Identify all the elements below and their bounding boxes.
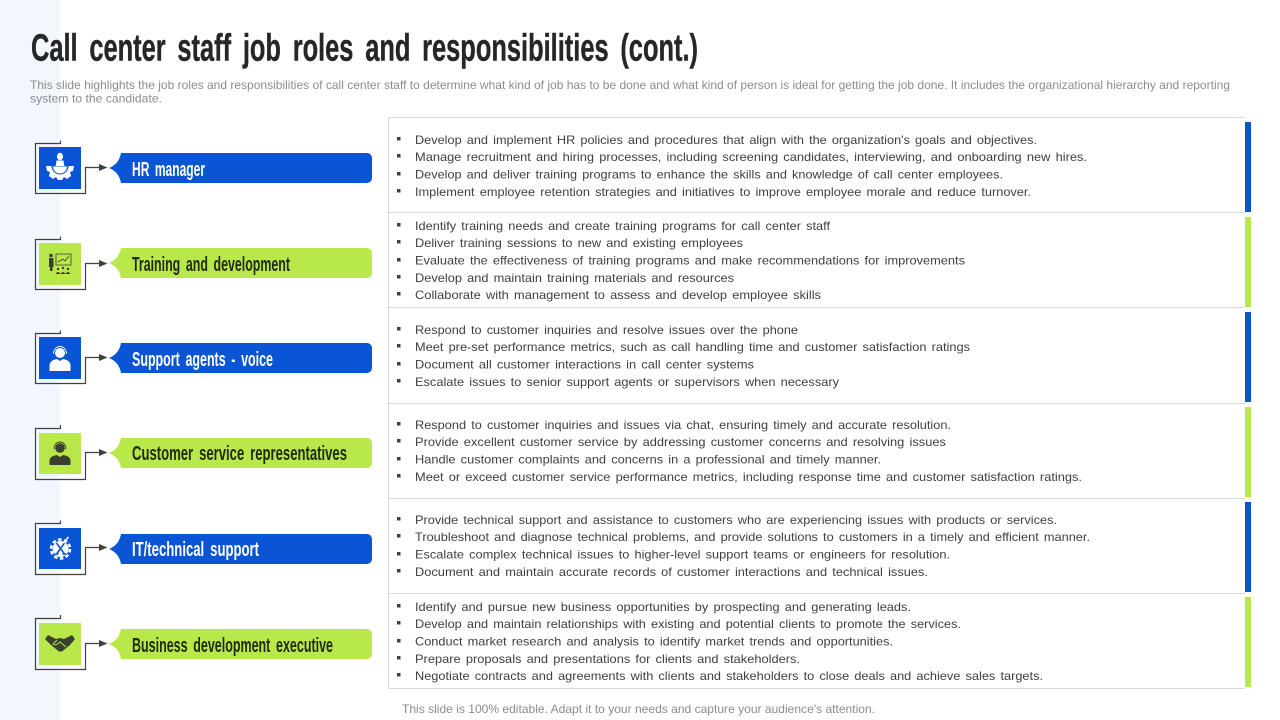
label: Training and development: Training and development — [132, 254, 290, 276]
responsibilities: Business development executive: Develop and maintain relationships with existing and potential clients to promote the services. — [415, 617, 961, 631]
responsibilities: HR manager: Manage recruitment and hiring processes, including screening candidates, interviewing, and onboarding new hires. — [415, 150, 1087, 164]
accent bar — [1245, 597, 1251, 687]
connector arrow — [36, 425, 108, 480]
responsibilities: Support agents - voice — [397, 323, 970, 389]
connector arrow — [36, 615, 108, 670]
responsibilities: IT/technical support — [397, 513, 1090, 579]
responsibilities: Training and development: Develop and maintain training materials and resources — [415, 271, 734, 285]
responsibilities: IT/technical support: Troubleshoot and diagnose technical problems, and provide solutions to customers in a timely and efficient manner. — [415, 530, 1090, 544]
responsibilities: Training and development — [397, 219, 965, 302]
responsibilities: Training and development: Evaluate the effectiveness of training programs and make recommendations for improvements — [415, 254, 965, 268]
subtitle description: system to the candidate. — [30, 92, 162, 106]
subtitle description: This slide highlights the job roles and responsibilities of call center staff to determine what kind of job has to be done and what kind of person is ideal for getting the job done. It includes the organizational hierarchy and reporting — [30, 78, 1230, 92]
responsibilities: Training and development: Collaborate with management to assess and develop employee skills — [415, 288, 821, 302]
label: IT/technical support — [109, 534, 372, 564]
icon: trainer and presentation board — [39, 243, 81, 285]
label: Training and development — [109, 248, 372, 278]
responsibilities: Training and development: Deliver training sessions to new and existing employees — [415, 236, 743, 250]
label: Customer service representatives — [109, 438, 372, 468]
label: Customer service representatives: Customer service representatives — [132, 443, 347, 465]
accent bar — [1245, 122, 1251, 212]
row 2: Training and development — [36, 217, 1251, 307]
icon: HR manager gear and person — [39, 147, 81, 189]
responsibilities: Customer service representatives — [397, 418, 1082, 484]
row 4: Customer service representatives — [36, 407, 1251, 497]
responsibilities: IT/technical support: Document and maintain accurate records of customer interactions and technical issues. — [415, 565, 928, 579]
label: Support agents - voice: Support agents - voice — [132, 349, 273, 371]
responsibilities: Customer service representatives: Meet or exceed customer service performance metrics, including response time and customer satisfaction ratings. — [415, 470, 1082, 484]
responsibilities: HR manager: Develop and implement HR policies and procedures that align with the organization's goals and objectives. — [415, 133, 1037, 147]
row 6: Business development executive — [36, 597, 1251, 687]
responsibilities: Business development executive — [397, 600, 1043, 683]
label: HR manager — [109, 153, 372, 183]
label: Support agents - voice — [109, 343, 372, 373]
responsibilities: HR manager: Develop and deliver training programs to enhance the skills and knowledge of call center employees. — [415, 168, 1003, 182]
accent bar — [1245, 312, 1251, 402]
connector arrow — [36, 330, 108, 384]
label: HR manager: HR manager — [132, 159, 205, 181]
icon: agent with headset — [39, 337, 81, 379]
responsibilities: Training and development: Identify training needs and create training programs for call center staff — [415, 219, 831, 233]
label: IT/technical support: IT/technical support — [132, 539, 259, 561]
left sidebar band — [0, 0, 60, 720]
connector arrow — [36, 140, 108, 194]
row 5: IT/technical support — [36, 502, 1251, 592]
responsibilities: Business development executive: Identify and pursue new business opportunities by prospecting and generating leads. — [415, 600, 911, 614]
connector arrow — [36, 520, 108, 574]
responsibilities: IT/technical support: Escalate complex technical issues to higher-level support teams or engineers for resolution. — [415, 548, 950, 562]
icon: handshake — [39, 623, 81, 665]
responsibilities: Support agents - voice: Escalate issues to senior support agents or supervisors when necessary — [415, 375, 839, 389]
responsibilities: Support agents - voice: Respond to customer inquiries and resolve issues over the phone — [415, 323, 798, 337]
accent bar — [1245, 217, 1251, 307]
title: Call center staff job roles and responsibilities (cont.) — [31, 28, 698, 70]
responsibilities: Support agents - voice: Meet pre-set performance metrics, such as call handling time and customer satisfaction ratings — [415, 340, 970, 354]
accent bar — [1245, 502, 1251, 592]
responsibilities: HR manager: Implement employee retention strategies and initiatives to improve employee morale and reduce turnover. — [415, 185, 1031, 199]
label: Business development executive: Business development executive — [132, 635, 333, 657]
label: Business development executive — [109, 629, 372, 659]
icon: representative with headset — [39, 433, 81, 474]
responsibilities: Business development executive: Conduct market research and analysis to identify market trends and opportunities. — [415, 634, 893, 648]
subtitle description — [30, 78, 1230, 106]
responsibilities: IT/technical support: Provide technical support and assistance to customers who are experiencing issues with products or services. — [415, 513, 1057, 527]
panel: responsibilities table frame — [388, 118, 1245, 688]
row 3: Support agents - voice — [36, 312, 1251, 402]
accent bar — [1245, 407, 1251, 497]
responsibilities: Business development executive: Negotiate contracts and agreements with clients and stakeholders to close deals and achieve sales targets. — [415, 669, 1043, 683]
responsibilities: HR manager — [397, 133, 1087, 199]
footer note: This slide is 100% editable. Adapt it to your needs and capture your audience's attention. — [402, 702, 875, 716]
responsibilities: Support agents - voice: Document all customer interactions in call center systems — [415, 358, 754, 372]
responsibilities: Business development executive: Prepare proposals and presentations for clients and stakeholders. — [415, 652, 800, 666]
connector arrow — [36, 236, 108, 290]
icon: gear with crossed tools — [39, 528, 81, 569]
responsibilities: Customer service representatives: Provide excellent customer service by addressing customer concerns and resolving issues — [415, 435, 946, 449]
row 1: HR manager — [36, 122, 1251, 212]
responsibilities: Customer service representatives: Respond to customer inquiries and issues via chat, ensuring timely and accurate resolution. — [415, 418, 951, 432]
responsibilities: Customer service representatives: Handle customer complaints and concerns in a professional and timely manner. — [415, 452, 881, 466]
